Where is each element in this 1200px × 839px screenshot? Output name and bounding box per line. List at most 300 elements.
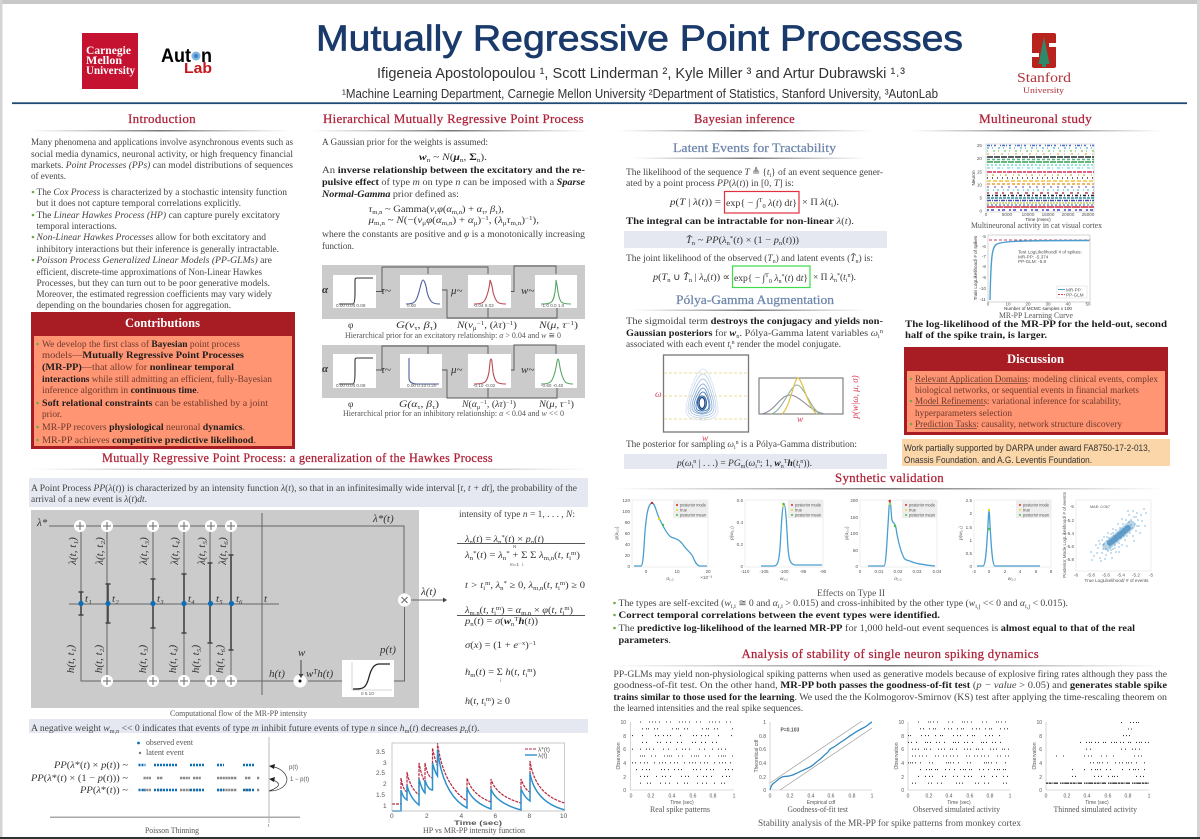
text block: contributions bullets: inference algorithm in continuous time.: [42, 385, 199, 396]
labels: inhibitory prior distributions: N(μ, τ: [539, 400, 562, 410]
text block: likelihood: n: [834, 278, 837, 284]
chart: observed simulated activity: 0: [907, 794, 910, 800]
text block: prior description: μ: [367, 216, 374, 226]
equations: intensity definitions: −x: [518, 641, 525, 647]
labels: excitatory prior distributions: , (: [484, 320, 493, 331]
text block: introduction paragraph: [31, 138, 293, 182]
chart: thinned simulated activity: [1032, 720, 1151, 806]
chart: posterior alpha 1,2: p(α₁,₂): [614, 526, 619, 539]
callout: latent events formula: t))): [786, 236, 798, 246]
callout: green boxed exponential: t) dt}: [788, 274, 808, 284]
diagram: excitatory hierarchical prior: w~: [521, 285, 534, 297]
chart: MR-PP learning curve: PP-GLM: -5.8: [1018, 259, 1047, 264]
chart: conditional density curves: p(w|ω, μ, σ): [850, 375, 860, 420]
labels: excitatory prior distributions: β: [422, 321, 430, 331]
chart: MR-PP learning curve: -6: [982, 244, 986, 249]
logo: Auton Lab: Aut n: [161, 46, 212, 67]
callout: red boxed exponential: T: [759, 198, 763, 204]
text block: log-likelihood conclusion: [905, 320, 1168, 341]
text block: log-likelihood conclusion: The log-likelihood of the MR-PP for the held-out, second: [905, 320, 1168, 330]
labels: excitatory prior distributions: ,: [418, 321, 424, 331]
legend: posterior markers 3: posterior mode: [909, 502, 935, 508]
text block: stability paragraph: the learned intensities and the real spike sequences.: [614, 704, 803, 714]
chart: spike raster of cat visual cortex: 20000: [1062, 212, 1075, 217]
chart: goodness-of-fit test: P=0.103: [780, 728, 799, 734]
chart: poisson thinning: [30, 737, 309, 828]
equations: intensity definitions: (: [554, 550, 558, 561]
chart: poisson thinning: PP(λ*(t) × (1 − p(t))) ~: [30, 773, 128, 784]
text block: polya-gamma augmentation: n: [732, 340, 735, 346]
equations: intensity definitions: λ: [464, 606, 470, 616]
chart: MR-PP learning curve: 30: [1045, 302, 1051, 306]
chart: posterior alpha 2,2: 200: [850, 498, 858, 503]
text block: likelihood: n: [856, 259, 859, 265]
equations: intensity definitions: (: [473, 534, 476, 545]
legend: posterior markers 4: posterior mode: [1023, 502, 1049, 508]
legend: learning curve: [1057, 286, 1087, 298]
diagram: computational flow of the MR-PP intensity: t₄: [188, 593, 195, 605]
equations: intensity definitions: (: [534, 534, 538, 545]
chart: posterior w 2,2: 6: [1035, 569, 1038, 574]
callout: latent events formula: PP(λ: [706, 236, 726, 246]
chart: posterior alpha 1,2: 10: [674, 569, 680, 574]
equations: intensity definitions: i: [569, 556, 571, 562]
text block: introduction bullets: temporal interactions.: [36, 222, 117, 232]
text block: prior description: α: [468, 216, 475, 226]
callout: point process definition: [29, 478, 588, 507]
text block: likelihood: (: [707, 272, 710, 283]
chart: thinned simulated activity: 6: [1039, 747, 1042, 753]
chart: poisson thinning: t: [268, 823, 270, 828]
chart: posterior alpha 2,2: [844, 498, 942, 581]
text block: prior description: τ: [482, 210, 485, 216]
chart: scatter of true vs posterior log-likelihood: -5: [1070, 504, 1074, 509]
labels: inhibitory prior distributions: φ: [348, 400, 354, 410]
chart: posterior alpha 2,2: 50: [853, 548, 858, 553]
chart: scatter of true vs posterior log-likelihood: MAE: 0.067: [1090, 505, 1110, 509]
chart: posterior alpha 2,2: 0.01: [875, 569, 884, 574]
diagram: excitatory hierarchical prior: α: [322, 284, 329, 296]
equations: intensity definitions: m,n: [544, 556, 554, 562]
chart: observed simulated activity: 0: [901, 788, 904, 794]
chart: observed simulated activity: 0.8: [987, 794, 994, 800]
equations: intensity definitions: *: [506, 551, 510, 557]
chart: posterior w 1,2: 0: [740, 564, 743, 569]
chart: MR-PP learning curve: [973, 234, 1091, 311]
title: Mutually Regressive Point Processes: [316, 18, 963, 58]
callout: red boxed exponential: λ: [766, 199, 773, 209]
equations: intensity definitions: t) = Σ h(t, t: [479, 668, 524, 678]
text block: prior description: (α: [432, 216, 441, 226]
callout: polya-gamma posterior: (t: [793, 459, 799, 469]
chart: posterior alpha 2,2: 0.04: [933, 569, 942, 574]
equations: intensity definitions: i: [500, 678, 501, 683]
callout: negative weight: m: [405, 729, 410, 735]
labels: inhibitory prior distributions: μ: [477, 405, 480, 411]
labels: excitatory prior distributions: τ: [430, 326, 434, 332]
text block: prior description: μ: [503, 221, 507, 227]
chart: posterior w 2,2: 0.5: [966, 551, 972, 556]
text block: likelihood: ∪: [671, 273, 683, 283]
text block: likelihood: n: [847, 273, 850, 279]
text block: prior description: φ: [437, 205, 443, 215]
text block: introduction paragraph: social media dynamics, neuronal activity, or high frequency financial: [31, 149, 293, 160]
chart: thinned simulated activity: 0: [1045, 794, 1048, 800]
chart: posterior w 2,2: 2: [969, 511, 972, 516]
equations: intensity definitions: ≥ 0,: [507, 581, 529, 591]
chart: scatter of true vs posterior log-likelihood: True LogLikelihood/ # of events: [1085, 578, 1149, 583]
chart: poisson thinning: 1 − p(t): [290, 777, 309, 783]
text block: likelihood: n: [689, 278, 692, 284]
chart: MR-PP learning curve: -10: [979, 286, 986, 291]
panel: analysis of stability: [613, 646, 1167, 829]
equations: intensity definitions: ,: [490, 581, 496, 591]
equations: intensity definitions: i: [558, 586, 560, 592]
affiliations: ¹Machine Learning Department, Carnegie Mellon University ²Department of Statistics, Stanford University, ³AutonLab: [342, 87, 938, 101]
equations: intensity definitions: t) = λ: [480, 551, 502, 561]
chart: scatter of true vs posterior log-likelihood: [1062, 491, 1153, 583]
equations: intensity definitions: t) × p: [508, 535, 530, 545]
text block: prior description: N(−(ν: [396, 216, 422, 226]
equations: intensity definitions: m,n: [521, 611, 531, 617]
chart: posterior w 2,2: 1.5: [966, 525, 972, 530]
diagram: computational flow of the MR-PP intensity: p(t): [379, 644, 396, 656]
callout: negative weight: (: [409, 723, 413, 734]
chart: thinned simulated activity: 0.4: [1084, 794, 1091, 800]
diagram: computational flow of the MR-PP intensity: λ(t, t₃): [138, 537, 150, 566]
labels: inhibitory prior distributions: ): [571, 399, 574, 410]
subheading: polya-gamma: Pólya-Gamma Augmentation: [676, 292, 835, 307]
labels: excitatory prior distributions: φ: [348, 321, 354, 331]
text block: contributions bullets: (MR-PP) —that allow for nonlinear temporal: [42, 362, 234, 373]
text block: likelihood: p(T | λ(t)) =: [669, 197, 721, 208]
chart: posterior alpha 2,2: 100: [850, 531, 858, 536]
chart: goodness-of-fit test: 0.2: [759, 775, 766, 781]
equations: intensity definitions: m,n: [470, 611, 480, 617]
labels: excitatory prior distributions: N(ν: [457, 321, 472, 331]
chart: thinned simulated activity: 8: [1039, 734, 1042, 740]
text block: likelihood: ated by a point process PP(λ(t)) in [0, T] is:: [626, 178, 794, 189]
heading: bayesian inference: Bayesian inference: [694, 111, 795, 126]
diagram: excitatory hierarchical prior: 0.00: [407, 303, 416, 308]
chart: posterior w 1,2: -110: [741, 569, 750, 574]
equations: intensity definitions: m: [527, 668, 533, 674]
chart: HP vs MR-PP intensity function: 4: [460, 813, 464, 820]
legend: posterior markers: [673, 500, 708, 518]
logo: Carnegie Mellon University: [82, 33, 138, 89]
equations: intensity definitions: φ(t, t: [542, 606, 561, 616]
text block: introduction bullets: The Cox Process is characterized by a stochastic intensity function: [36, 187, 287, 198]
labels: inhibitory prior distributions: ): [513, 399, 516, 410]
text block: synthetic validation bullets: i,j: [975, 604, 981, 610]
diagram: computational flow of the MR-PP intensity: h(t, t₅): [190, 645, 202, 673]
chart: thinned simulated activity: 0.6: [1105, 794, 1112, 800]
panel: discussion: [904, 347, 1168, 435]
chart: real spike patterns: 0.2: [648, 794, 655, 800]
text block: likelihood: ) is:: [859, 253, 873, 264]
labels: inhibitory prior distributions: −1: [506, 400, 513, 406]
text block: discussion bullets: [910, 375, 1158, 430]
equations: intensity definitions: T: [514, 617, 519, 623]
chart: spike raster of cat visual cortex: 10000: [1022, 212, 1035, 217]
chart: MR-PP learning curve: -7: [982, 254, 986, 259]
chart: spike raster of cat visual cortex: 5: [979, 196, 982, 200]
callout: red boxed exponential: [724, 192, 799, 213]
logo: Stanford University: University: [1023, 86, 1064, 95]
heading: multineuronal study: Multineuronal study: [979, 111, 1092, 126]
chart: posterior w 1,2: 0.4: [737, 520, 743, 525]
chart: HP vs MR-PP intensity function: Time (sec): [454, 820, 502, 827]
callout: polya-gamma posterior: PG: [727, 459, 741, 469]
callout: latent events formula: n: [727, 241, 730, 247]
text block: synthetic validation bullets: i,i: [778, 604, 783, 610]
diagram: computational flow of the MR-PP intensity: t₆: [236, 593, 243, 605]
chart: real spike patterns: Time (sec): [670, 800, 694, 806]
diagram: excitatory hierarchical prior: [322, 265, 585, 319]
chart: MR-PP learning curve: 0: [987, 302, 990, 306]
text block: polya-gamma augmentation: n: [736, 334, 740, 340]
equations: intensity definitions: m: [470, 673, 476, 679]
labels: excitatory prior distributions: ): [433, 320, 437, 331]
callout: green boxed exponential: *: [782, 274, 785, 280]
legend: posterior markers: posterior mean: [680, 512, 706, 518]
caption: inhibitory prior: Hierarchical prior for an inhibitory relationship: α < 0.04 and w << 0: [343, 409, 564, 418]
chart: posterior alpha 1,2: 20: [625, 553, 630, 558]
chart: MR-PP learning curve: 20: [1025, 302, 1031, 306]
chart: observed simulated activity: 10: [898, 720, 904, 726]
equations: intensity definitions: t): [538, 535, 544, 545]
text block: prior description: α: [477, 205, 483, 215]
diagram: inhibitory hierarchical prior: α: [322, 363, 329, 375]
panel: synthetic validation: [613, 470, 1166, 646]
labels: inhibitory prior distributions: β: [425, 400, 433, 410]
equations: intensity definitions: ) =: [501, 605, 516, 616]
legend: posterior markers: posterior mode: [680, 502, 706, 508]
chart: goodness-of-fit test: 0.2: [787, 794, 794, 800]
equations: intensity definitions: m: [496, 606, 501, 612]
chart: thinned simulated activity: 4: [1039, 761, 1042, 767]
chart: HP vs MR-PP intensity function: 10: [560, 813, 568, 820]
chart: scatter of true vs posterior log-likelihood: -5.4: [1066, 531, 1074, 536]
chart: conditional density curves: w: [797, 415, 804, 425]
chart: posterior w 2,2: p(w₂,₂): [958, 526, 963, 540]
text block: likelihood: ).: [833, 197, 839, 208]
legend: posterior markers 3: true: [909, 508, 916, 512]
text block: prior description: n: [427, 158, 430, 164]
chart: posterior w 1,2: 0.2: [737, 542, 743, 547]
text block: prior description: ,: [485, 205, 490, 215]
diagram: computational flow of the MR-PP intensity: w: [298, 647, 306, 659]
equations: intensity definitions: h: [519, 617, 524, 627]
diagram: inhibitory hierarchical prior: 0.00 0.10 0.20: [407, 383, 437, 388]
text block: stability paragraph: trains similar to those used for the learning . We used the the Kolmogorov-Smirnov (KS) test after applying the time-rescaling theorem on: [614, 692, 1167, 703]
equations: intensity definitions: (t)): [524, 617, 537, 627]
equations: intensity definitions: (: [480, 605, 483, 616]
text block: prior description: An inverse relationship between the excitatory and the re-: [322, 166, 585, 176]
chart: MR-PP learning curve: Test LogLikelihood/ # of spikes:: [1018, 250, 1082, 254]
chart: spike raster of cat visual cortex: 25000: [1082, 212, 1095, 217]
chart: scatter of true vs posterior log-likelihood: -5.2: [1066, 518, 1074, 523]
text block: prior description: m,n: [442, 221, 452, 227]
equations: intensity definitions: n: [500, 586, 504, 592]
labels: inhibitory prior distributions: , (: [487, 399, 495, 410]
text block: prior description: A Gaussian prior for the weights is assumed:: [322, 137, 488, 148]
chart: conditional density curves: [759, 375, 860, 425]
chart: posterior alpha 1,2: 100: [622, 509, 630, 514]
diagram: computational flow of the MR-PP intensity: T: [313, 668, 318, 676]
equations: intensity definitions: ): [525, 640, 529, 651]
equations: intensity definitions: i: [563, 611, 565, 617]
chart: posterior alpha 2,2: 150: [850, 515, 858, 520]
chart: posterior alpha 1,2: 80: [625, 520, 630, 525]
chart: posterior w 2,2: 2.5: [966, 498, 972, 503]
chart: goodness-of-fit test: 0.4: [808, 794, 815, 800]
diagram: excitatory hierarchical prior: 0.00 0.04 0.08: [336, 303, 366, 308]
callout: latent events formula: [624, 231, 887, 248]
diagram: computational flow of the MR-PP intensity: t₁: [85, 593, 92, 605]
text block: discussion bullets: Prediction Tasks: causality, network structure discovery: [915, 420, 1122, 430]
text block: introduction bullets: depending on the boundaries chosen for aggregation.: [36, 300, 231, 311]
equations: intensity definitions: λ: [527, 581, 533, 591]
chart: posterior w 2,2: 2: [1004, 569, 1007, 574]
text block: synthetic validation bullets: << 0 and: [980, 599, 1020, 609]
chart: posterior alpha 1,2: 60: [625, 531, 630, 536]
chart: HP vs MR-PP intensity function: 2: [425, 813, 429, 820]
heading: hierarchical prior: Hierarchical Mutually Regressive Point Process: [323, 111, 584, 126]
chart: spike raster of cat visual cortex: 15000: [1042, 212, 1055, 217]
equations: intensity definitions: α: [516, 606, 522, 616]
diagram: inhibitory hierarchical prior: [322, 345, 585, 398]
chart: real spike patterns: 0: [630, 794, 633, 800]
chart: spike raster of cat visual cortex: Time (msec): [1025, 217, 1051, 222]
chart: scatter of true vs posterior log-likelihood: -5.8: [1087, 572, 1095, 578]
chart: HP vs MR-PP intensity function: 2.5: [376, 770, 385, 777]
diagram: computational flow of the MR-PP intensity: λ(t, t₆): [217, 537, 229, 566]
chart: MR-PP learning curve: MR-PP: -5.374: [1018, 254, 1049, 260]
text block: likelihood: × Π λ(t: [802, 198, 831, 208]
text block: prior description: −1: [481, 216, 489, 222]
chart: scatter of true vs posterior log-likelihood: -5.6: [1066, 544, 1074, 549]
callout: negative weight: << 0 indicates that events of type: [119, 723, 252, 734]
legend: learning curve: MR-PP: [1066, 288, 1081, 292]
chart: MR-PP learning curve: -11: [980, 297, 986, 302]
chart: observed simulated activity: 0.6: [967, 794, 974, 800]
equations: intensity definitions: m: [571, 551, 577, 557]
equations: intensity definitions: (: [477, 550, 480, 561]
text block: likelihood: ).: [850, 272, 856, 283]
chart: thinned simulated activity: Observation: [1032, 742, 1038, 769]
equations: intensity definitions: n: [470, 556, 473, 562]
text block: likelihood: i: [831, 203, 833, 209]
equations: intensity definitions: [457, 509, 585, 708]
legend: thinning event types: [137, 738, 194, 757]
diagram: inhibitory hierarchical prior: 0.00 0.04 0.08: [336, 383, 366, 388]
equations: intensity definitions: (: [543, 580, 547, 591]
legend: posterior markers 4: [1016, 500, 1051, 518]
legend: learning curve: PP-GLM: [1066, 292, 1084, 298]
authors: Ifigeneia Apostolopoulou ¹, Scott Linderman ², Kyle Miller ³ and Artur Dubrawski ¹˒³: [377, 65, 905, 82]
diagram: excitatory hierarchical prior: τ~: [381, 285, 391, 297]
equations: intensity definitions: t > t: [465, 581, 484, 591]
callout: latent events formula: T̂: [686, 233, 693, 246]
chart: spike raster of cat visual cortex: 15: [977, 170, 982, 174]
legend: posterior markers 3: posterior mean: [909, 512, 935, 518]
text block: likelihood: } of an event sequence gener-: [771, 167, 883, 178]
text block: introduction bullets: efficient, discrete-time approximations of Non-Linear Hawkes: [36, 267, 262, 278]
chart: goodness-of-fit test: Empirical cdf: [807, 800, 836, 806]
chart: goodness-of-fit test: 0.4: [759, 761, 766, 767]
text block: introduction paragraph: markets. Point Processes (PPs) can model distributions of sequences: [31, 160, 293, 171]
legend: posterior markers 3: [902, 500, 937, 518]
chart: real spike patterns: 0.6: [690, 794, 697, 800]
diagram: computational flow of the MR-PP intensity: λ(t, t₅): [196, 537, 208, 566]
text block: likelihood: [624, 167, 887, 288]
callout: polya-gamma posterior: i: [755, 464, 757, 470]
text block: introduction bullets: Processes, but they can turn out to be poor generative models.: [36, 279, 270, 289]
logo: Auton Lab: [161, 46, 212, 77]
text block: prior description: ~ Gamma(: [382, 204, 430, 215]
caption: cat visual cortex: Multineuronal activity in cat visual cortex: [971, 221, 1103, 230]
text block: prior description: Σ: [469, 153, 477, 163]
diagram: excitatory hierarchical prior: -1.0 0.0 1.0: [541, 303, 565, 308]
equations: intensity definitions: (: [476, 667, 479, 678]
equations: intensity definitions: n: [531, 540, 534, 546]
text block: prior description: , (: [489, 215, 498, 226]
chart: posterior alpha 2,2: 0: [859, 569, 862, 574]
callout: polya-gamma posterior: w: [774, 459, 782, 469]
chart: real spike patterns: [616, 720, 736, 806]
chart: posterior alpha 2,2: α₂,₂: [894, 576, 902, 581]
chart: goodness-of-fit test: 0.8: [759, 734, 766, 740]
caption: HP vs MR-PP: HP vs MR-PP intensity function: [423, 826, 526, 835]
text block: likelihood: i: [769, 173, 772, 179]
chart: thinned simulated activity: 10: [1036, 720, 1042, 726]
legend: posterior markers 2: [788, 500, 823, 518]
chart: goodness-of-fit test: 0.6: [759, 747, 766, 753]
chart: posterior w 2,2: [958, 498, 1053, 581]
text block: prior description: m,n: [372, 210, 382, 216]
equations: intensity definitions: m: [485, 581, 491, 587]
equations: intensity definitions: + Σ Σ: [510, 551, 539, 561]
text block: posterior for sampling: The posterior for sampling ω: [626, 440, 734, 450]
diagram: computational flow of the MR-PP intensity: t₂: [112, 593, 119, 605]
chart: observed simulated activity: 6: [901, 747, 904, 753]
chart: observed simulated activity: [894, 720, 1012, 806]
legend: posterior markers 4: posterior mean: [1023, 512, 1049, 518]
chart: posterior w 2,2: 8: [1050, 569, 1053, 574]
diagram: computational flow of the MR-PP intensity: h(t, t₆): [214, 645, 226, 673]
diagram: inhibitory hierarchical prior: -0.60 -0.40: [541, 383, 564, 388]
subheading: latent events: Latent Events for Tractability: [673, 140, 837, 155]
diagram: computational flow of the MR-PP intensity: h(t, t₁): [65, 645, 77, 673]
labels: inhibitory prior distributions: λτ): [495, 400, 506, 410]
chart: observed simulated activity: 2: [901, 775, 904, 781]
equations: intensity definitions: (: [474, 616, 477, 627]
diagram: computational flow of the MR-PP intensity: h(t, t₄): [167, 645, 179, 673]
chart: real spike patterns: 0.4: [669, 794, 676, 800]
heading: contributions: Contributions: [125, 316, 200, 330]
diagram: excitatory hierarchical prior: -0.04 0.03: [473, 303, 494, 308]
text block: prior description: n: [477, 158, 480, 164]
callout: negative weight: m,n: [110, 729, 119, 735]
text block: stability paragraph: goodness-of-fit test. On the other hand, MR-PP both passes the goodness-of-fit test (p − value > 0.05) and generates stable spike: [614, 680, 1167, 691]
callout: red boxed exponential: 0: [762, 204, 766, 210]
text block: prior description: w: [419, 153, 428, 163]
chart: goodness-of-fit test: 0.6: [828, 794, 835, 800]
callout: latent events formula: n: [779, 241, 782, 247]
text block: prior description: ~: [430, 153, 442, 163]
callout: polya-gamma posterior: m: [741, 464, 746, 470]
